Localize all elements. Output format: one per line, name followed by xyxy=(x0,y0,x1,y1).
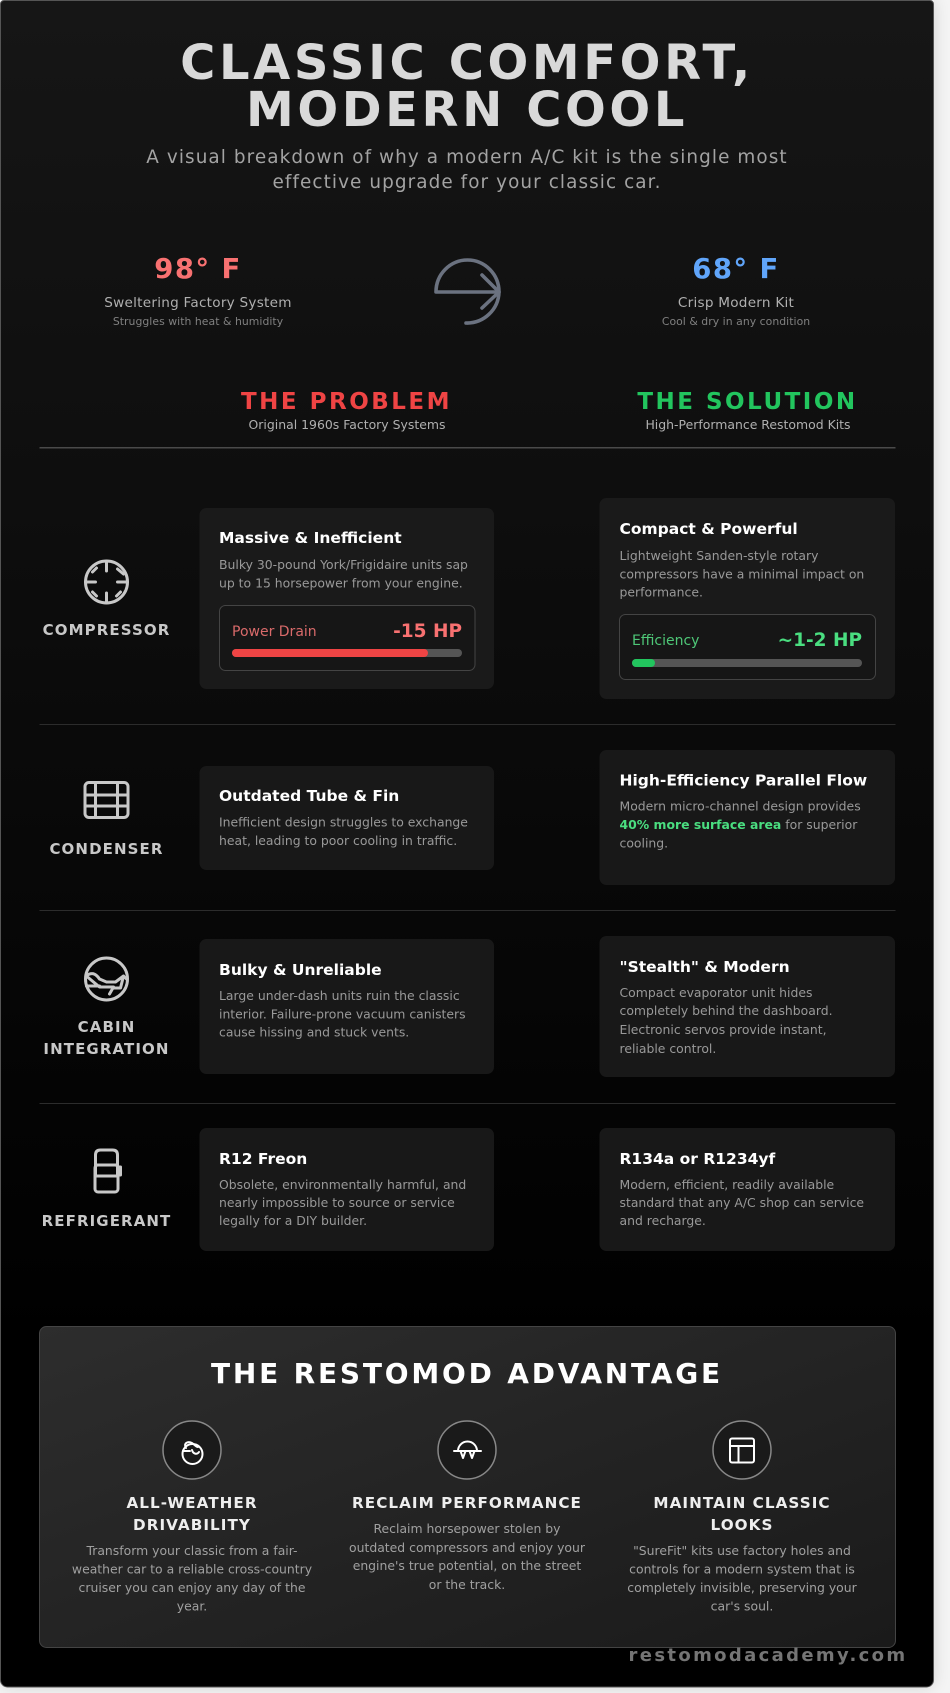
benefit text: Reclaim horsepower stolen by xyxy=(373,1521,561,1536)
solution card: refrigerant: standard that any A/C shop can service xyxy=(620,1195,864,1210)
benefit text: engine's true potential, on the street xyxy=(353,1558,581,1573)
benefit heading: LOOKS xyxy=(711,1516,773,1534)
problem card: condenser: Outdated Tube & Fin xyxy=(219,787,399,805)
benefit text: outdated compressors and enjoy your xyxy=(349,1540,586,1555)
benefit text xyxy=(72,1543,312,1614)
solution card: compressor: compressors have a minimal impact on xyxy=(620,566,864,582)
icon: condenser xyxy=(85,782,128,818)
temperature: factory system: Struggles with heat & humidity xyxy=(113,315,284,328)
benefit: all-weather drivability xyxy=(72,1421,312,1614)
benefit text: cruiser you can enjoy any day of the xyxy=(79,1580,305,1595)
benefit: reclaim performance xyxy=(349,1421,586,1592)
benefit text: "SureFit" kits use factory holes and xyxy=(633,1543,851,1558)
title xyxy=(180,35,754,138)
temperature: factory system xyxy=(104,253,292,328)
temperature: modern kit: Cool & dry in any condition xyxy=(662,315,810,328)
icon: refrigerant canister xyxy=(95,1150,120,1192)
label: refrigerant: REFRIGERANT xyxy=(42,1212,171,1230)
metric: efficiency xyxy=(620,614,876,680)
benefit: maintain classic looks xyxy=(627,1421,858,1614)
row: cabin integration xyxy=(43,936,895,1077)
benefit heading: RECLAIM PERFORMANCE xyxy=(352,1494,582,1512)
panel heading: THE RESTOMOD ADVANTAGE xyxy=(211,1357,723,1390)
heading: the solution: High-Performance Restomod Kits xyxy=(645,417,851,432)
icon: weather xyxy=(163,1421,221,1479)
solution card: compressor xyxy=(600,498,895,699)
subtitle: effective upgrade for your classic car. xyxy=(272,172,662,193)
label: compressor: COMPRESSOR xyxy=(43,621,170,639)
metric: power drain xyxy=(220,606,475,670)
problem card: condenser: Inefficient design struggles to exchange xyxy=(219,814,468,830)
solution card: refrigerant: Modern, efficient, readily available xyxy=(620,1177,834,1192)
metric: efficiency: ~1-2 HP xyxy=(778,630,862,651)
icon: steering wheel xyxy=(86,958,128,1000)
solution card: cabin: "Stealth" & Modern xyxy=(620,958,790,976)
problem card: cabin: Large under-dash units ruin the classic xyxy=(219,988,460,1003)
temperature: modern kit xyxy=(662,253,810,328)
heading: the problem xyxy=(241,389,452,432)
icon: layout xyxy=(713,1421,771,1479)
solution card: cabin: Electronic servos provide instant, xyxy=(620,1022,827,1037)
solution card: cabin: completely behind the dashboard. xyxy=(620,1003,833,1018)
problem card: refrigerant xyxy=(200,1128,494,1251)
row: refrigerant xyxy=(42,1128,895,1251)
benefit text xyxy=(627,1543,858,1614)
problem card: refrigerant: legally for a DIY builder. xyxy=(219,1213,367,1228)
solution card: condenser: High-Efficiency Parallel Flow xyxy=(620,772,867,790)
benefit text: Transform your classic from a fair- xyxy=(85,1543,298,1558)
solution card: compressor: Compact & Powerful xyxy=(620,520,798,538)
title: MODERN COOL xyxy=(246,82,688,138)
problem card: refrigerant: Obsolete, environmentally harmful, and xyxy=(219,1177,466,1192)
solution card: compressor: performance. xyxy=(620,584,703,600)
benefit text: weather car to a reliable cross-country xyxy=(72,1562,312,1576)
problem card: condenser: heat, leading to poor cooling in traffic. xyxy=(219,833,457,848)
heading: the problem: Original 1960s Factory Systems xyxy=(249,417,445,432)
metric: power drain: -15 HP xyxy=(393,621,462,642)
heading: the solution xyxy=(637,389,858,432)
label: cabin integration: CABIN xyxy=(78,1018,135,1036)
problem card: compressor xyxy=(200,508,494,689)
benefit heading xyxy=(653,1494,831,1534)
temperature: modern kit: 68° F xyxy=(692,253,780,285)
solution card: compressor: Lightweight Sanden-style rotary xyxy=(620,548,818,563)
icon: transition arrow xyxy=(436,260,499,323)
temperature: modern kit: Crisp Modern Kit xyxy=(678,295,794,311)
solution card: refrigerant xyxy=(600,1128,895,1251)
benefit text: completely invisible, preserving your xyxy=(627,1580,858,1595)
problem card: compressor: Massive & Inefficient xyxy=(219,529,402,547)
problem card: cabin xyxy=(200,939,494,1074)
benefit heading: ALL-WEATHER xyxy=(126,1494,258,1512)
problem card: refrigerant: R12 Freon xyxy=(219,1150,307,1168)
problem card: cabin: cause hissing and stuck vents. xyxy=(219,1024,409,1040)
solution card: condenser: 40% more surface area for superior xyxy=(620,817,858,832)
problem card: condenser xyxy=(200,766,494,870)
panel: the restomod advantage xyxy=(40,1326,896,1648)
benefit text: or the track. xyxy=(429,1577,505,1592)
solution card: cabin xyxy=(600,936,895,1077)
benefit heading xyxy=(126,1494,258,1534)
solution card: condenser: Modern micro-channel design provides xyxy=(620,798,861,814)
problem card: compressor: up to 15 horsepower from your engine. xyxy=(219,576,463,590)
benefit text xyxy=(349,1521,586,1592)
heading: the problem: THE PROBLEM xyxy=(241,389,452,415)
solution card: condenser: cooling. xyxy=(620,836,668,850)
subtitle xyxy=(146,147,788,193)
row: condenser xyxy=(49,750,895,885)
heading: the solution: THE SOLUTION xyxy=(637,389,858,415)
problem card: refrigerant: nearly impossible to source or service xyxy=(219,1195,455,1210)
footer: website: restomodacademy.com xyxy=(629,1645,908,1666)
label: cabin integration: INTEGRATION xyxy=(43,1040,170,1058)
temperature: factory system: Sweltering Factory System xyxy=(104,295,292,311)
benefit text: controls for a modern system that is xyxy=(629,1562,855,1576)
problem card: cabin: Bulky & Unreliable xyxy=(219,961,382,979)
benefit heading: DRIVABILITY xyxy=(133,1516,251,1534)
row: compressor xyxy=(43,498,895,699)
benefit text: year. xyxy=(177,1598,207,1614)
icon: compressor xyxy=(86,561,128,603)
solution card: refrigerant: R134a or R1234yf xyxy=(620,1150,776,1168)
icon: gauge xyxy=(438,1421,496,1479)
problem card: compressor: Bulky 30-pound York/Frigidaire units sap xyxy=(219,557,468,572)
temperature: factory system: 98° F xyxy=(154,253,242,285)
benefit text: car's soul. xyxy=(711,1598,773,1614)
solution card: cabin: Compact evaporator unit hides xyxy=(620,985,812,1000)
problem card: cabin: interior. Failure-prone vacuum canisters xyxy=(219,1006,466,1022)
label: condenser: CONDENSER xyxy=(49,840,164,858)
subtitle: A visual breakdown of why a modern A/C kit is the single most xyxy=(146,147,788,168)
solution card: refrigerant: and recharge. xyxy=(620,1213,706,1228)
benefit heading: MAINTAIN CLASSIC xyxy=(653,1494,831,1512)
title: CLASSIC COMFORT, xyxy=(180,35,754,91)
metric: efficiency: Efficiency xyxy=(632,633,699,649)
solution card: condenser xyxy=(600,750,895,885)
solution card: cabin: reliable control. xyxy=(620,1041,716,1056)
label: cabin integration xyxy=(43,1018,170,1058)
metric: power drain: Power Drain xyxy=(232,624,317,640)
